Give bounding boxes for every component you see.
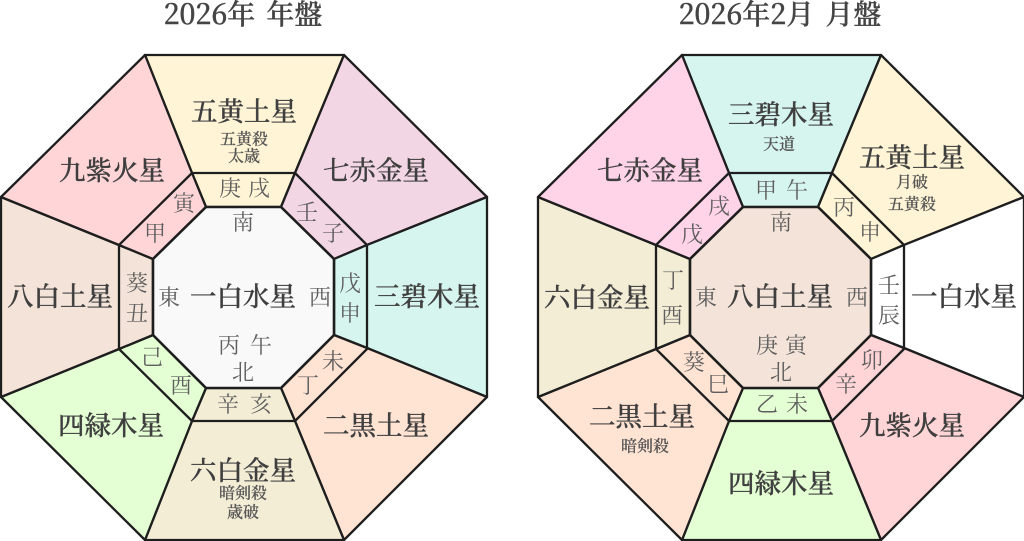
sector: bottom-right nine purple: 辛 [835,368,857,399]
center: eight white: 寅 [785,329,808,360]
center: one white: 東 [158,281,180,312]
sector: bottom-left two black: 葵 [683,346,705,377]
sector: right three green [334,197,487,397]
sector: right one white: 一白水星 [911,275,1017,314]
sector: bottom four green: 乙 [756,388,778,419]
sector: bottom-right two black: 二黒土星 [323,404,429,443]
sector: top three green: 午 [786,174,808,205]
sector: top-right five yellow: 申 [859,216,881,247]
ring divider [119,173,367,421]
ring divider [656,173,904,421]
sector: top three green: 天道 [763,132,795,154]
sector: top-right seven red [281,55,487,259]
sector: top-right five yellow: 月破 [896,170,928,192]
sector: bottom six white: 暗剣殺 [219,480,267,504]
sector: bottom six white: 六白金星 [190,449,296,488]
sector: right one white: 壬 [878,269,900,300]
center: eight white: 八白土星 [727,275,833,314]
sector: bottom-right nine purple: 卯 [861,344,883,375]
sector: top-left nine purple [1,55,206,259]
center: one white: 西 [309,281,331,312]
sector: top-right five yellow: 五黄土星 [859,136,965,175]
sector: top-left seven red: 戌 [708,190,730,221]
sector: left six white: 酉 [661,299,683,330]
center: one white [153,206,334,388]
sector: top-right five yellow: 五黄殺 [888,192,936,214]
center: eight white: 西 [846,281,868,312]
sector: bottom four green [682,388,881,540]
sector: bottom-right nine purple [818,335,1024,540]
center: one white: 丙 [218,329,240,360]
center: one white: 南 [232,206,254,237]
sector: bottom-left four green [1,335,206,540]
sector: left eight white: 丑 [126,297,148,328]
sector: top-right seven red: 子 [322,217,344,248]
center: eight white: 北 [770,356,792,387]
center: one white: 一白水星 [190,275,296,314]
sector: top-left seven red: 七赤金星 [597,149,703,188]
sector: left eight white: 葵 [126,267,148,298]
sector: bottom-right two black: 未 [322,345,344,376]
sector: right one white: 辰 [878,299,900,330]
center: eight white [690,206,871,388]
sector: bottom six white: 辛 [217,388,239,419]
sector: bottom-left two black: 巳 [707,368,729,399]
center: eight white: 東 [695,281,717,312]
sector: top-left nine purple: 寅 [173,187,196,218]
sector: bottom-left two black: 二黒土星 [589,395,695,434]
sector: top-left nine purple: 甲 [144,217,166,248]
sector: right three green: 三碧木星 [374,275,480,314]
sector: top-left seven red: 戊 [681,218,703,249]
chart: annual board [1,55,487,540]
sector: left eight white [1,197,153,397]
center: eight white: 南 [770,206,792,237]
sector: left six white [538,197,690,397]
sector: top three green: 甲 [755,174,777,205]
sector: bottom-left two black: 暗剣殺 [621,434,669,456]
sector: bottom four green: 未 [786,388,808,419]
sector: north-top five yellow: 五黄土星 [191,90,297,129]
sector: bottom six white: 歳破 [227,500,259,522]
center: eight white: 庚 [756,329,778,360]
sector: top-right five yellow [818,55,1024,259]
sector: bottom four green: 四緑木星 [728,462,834,501]
sector: north-top five yellow: 庚 [219,172,241,203]
sector: top three green: 三碧木星 [728,93,834,132]
sector: top three green [682,55,881,207]
sector: bottom six white [145,388,344,540]
sector: top-right five yellow: 丙 [833,191,855,222]
sector: left six white: 六白金星 [544,276,650,315]
chart: monthly board [538,55,1024,540]
sector: bottom-right two black: 丁 [297,369,319,400]
sector: bottom-right two black [281,335,487,540]
sector: bottom-right nine purple: 九紫火星 [859,404,965,443]
sector: bottom-left four green: 酉 [170,369,192,400]
center: one white: 午 [250,329,272,360]
sector: north-top five yellow: 太歳 [228,144,260,166]
sector: north-top five yellow [145,55,344,207]
sector: north-top five yellow: 五黄殺 [220,126,268,150]
center: one white: 北 [232,356,254,387]
sector: right one white [871,197,1024,397]
sector: bottom-left two black [538,335,743,540]
sector: top-right seven red: 壬 [296,196,318,227]
sector: bottom-left four green: 四緑木星 [58,404,164,443]
sector: bottom six white: 亥 [250,388,272,419]
sector: left eight white: 八白土星 [7,275,113,314]
sector: right three green: 戊 [339,267,361,298]
sector: top-right seven red: 七赤金星 [323,149,429,188]
sector: left six white: 丁 [662,264,684,295]
sector: bottom-left four green: 己 [141,341,163,372]
sector: top-left nine purple: 九紫火星 [59,149,165,188]
sector: north-top five yellow: 戌 [248,172,270,203]
sector: top-left seven red [538,55,743,259]
sector: right three green: 申 [339,297,361,328]
